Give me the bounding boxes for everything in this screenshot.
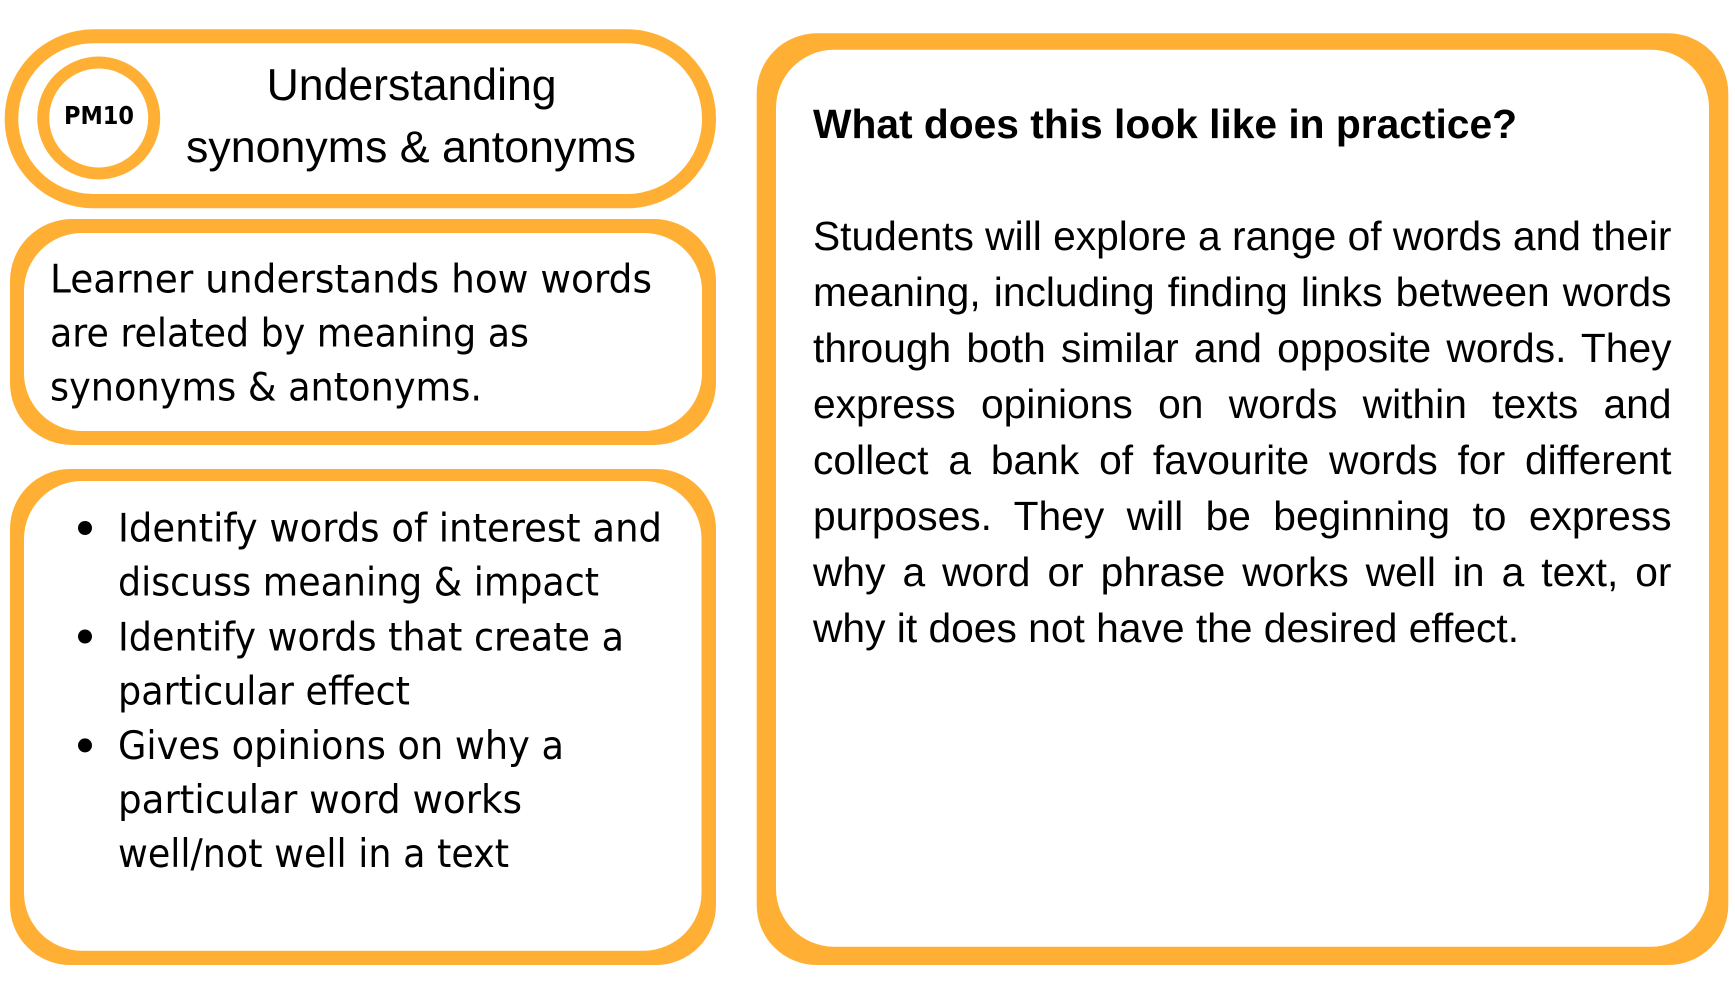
bullet 2: particular effect <box>78 616 624 715</box>
bullet 3: opinions: particular word works <box>118 778 522 823</box>
title text: Understanding <box>267 61 557 110</box>
badge: PM10: PM10 <box>64 101 134 130</box>
panel: title <box>5 29 716 208</box>
panel: bullet list <box>10 469 716 965</box>
statement text: synonyms & antonyms. <box>50 366 482 410</box>
bullet 1: words of interest <box>78 507 662 606</box>
badge: PM10 <box>43 62 154 174</box>
practice heading: What does this look like in practice? <box>813 101 1517 147</box>
bullet 2: particular effect: Identify words that create a <box>118 616 624 660</box>
bullet 3: opinions <box>78 724 564 877</box>
bullet 2: particular effect: particular effect <box>118 670 410 715</box>
title text <box>186 61 636 172</box>
title panel frame <box>5 29 716 208</box>
statement panel frame <box>10 219 716 445</box>
list panel frame <box>10 469 716 965</box>
practice panel frame <box>757 33 1728 965</box>
panel: in practice <box>757 33 1728 965</box>
statement text: are related by meaning as <box>50 312 529 357</box>
statement text: Learner understands how words <box>50 258 652 303</box>
bullet 1: words of interest: discuss meaning & impact <box>118 560 599 606</box>
bullet 1: words of interest: Identify words of interest and <box>118 507 662 552</box>
title text: synonyms & antonyms <box>186 123 636 172</box>
panel: learner statement <box>10 219 716 445</box>
practice paragraph: Students will explore a range of words and their meaning, including finding links between words through both similar and opposite words. They express opinions on words within texts and collect a bank of favourite words for different purposes. They will be beginning to express why a word or phrase works well in a text, or why it does not have the desired effect. <box>813 213 1672 651</box>
bullet 3: opinions: well/not well in a text <box>118 832 509 877</box>
bullet 3: opinions: Gives opinions on why a <box>118 724 564 769</box>
statement text <box>50 258 652 410</box>
